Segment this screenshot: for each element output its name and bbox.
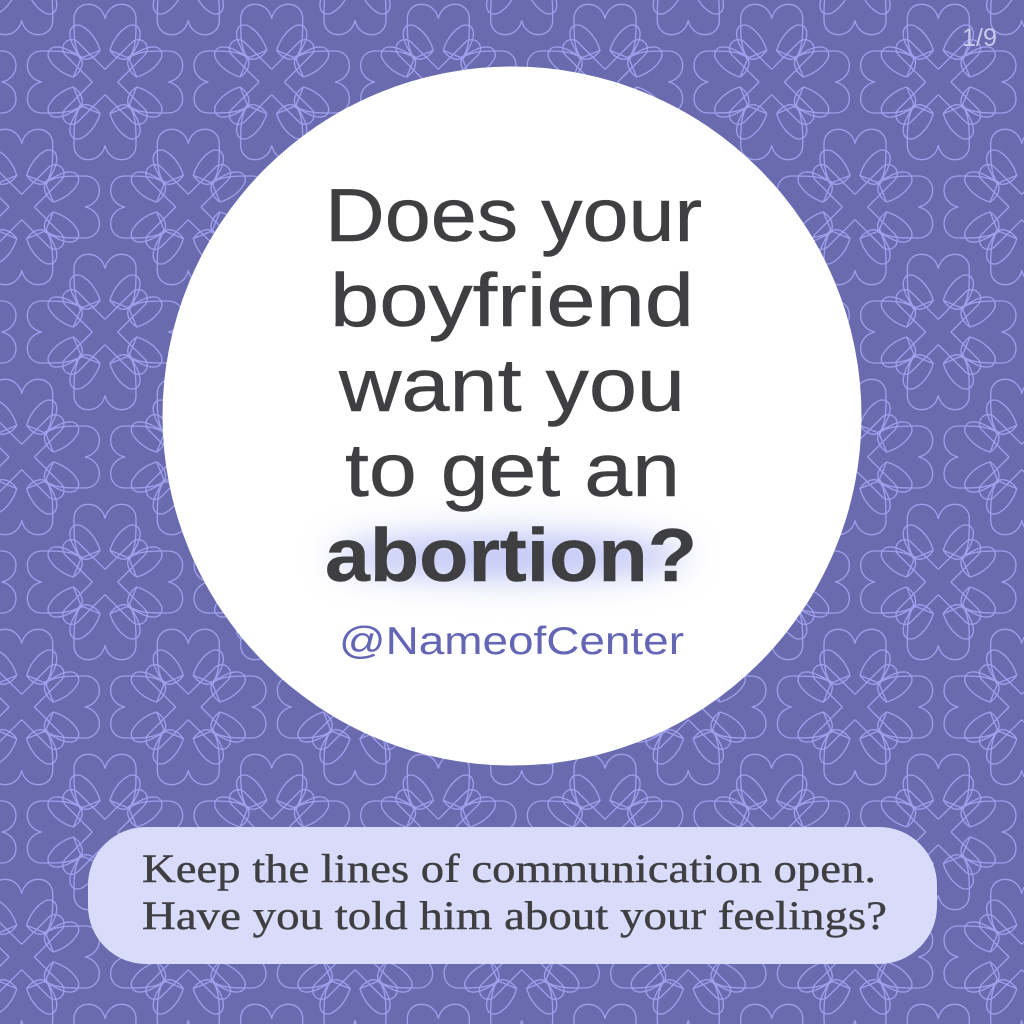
highlight glow behind abortion xyxy=(332,532,688,580)
title: abortion? xyxy=(325,513,697,597)
callout text: Keep the lines of communication open. xyxy=(142,846,876,891)
callout pill xyxy=(88,827,937,964)
white circle panel xyxy=(162,66,862,766)
title: want you xyxy=(338,343,685,427)
title: to get an xyxy=(345,428,680,512)
callout text: Have you told him about your feelings? xyxy=(142,893,887,938)
title xyxy=(325,173,702,597)
title: Does your xyxy=(325,173,702,257)
callout text xyxy=(142,846,887,938)
title: boyfriend xyxy=(330,258,694,342)
page number: 1/9 xyxy=(962,24,997,52)
handle: @NameofCenter xyxy=(339,620,684,663)
